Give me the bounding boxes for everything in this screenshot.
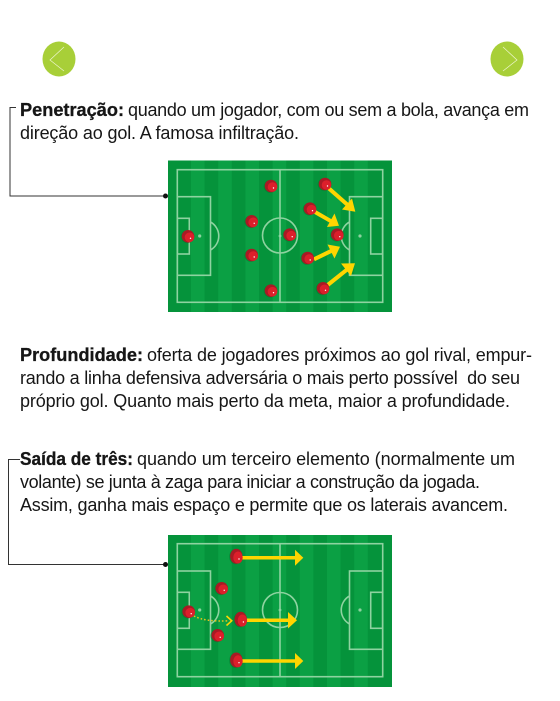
icon: previous arrow button <box>42 42 76 76</box>
connector: Penetração to pitch <box>10 108 168 198</box>
text block: Penetração <box>20 100 529 143</box>
icon: next arrow button <box>490 42 524 76</box>
arrows: forward runs <box>314 188 355 285</box>
text block: Profundidade: Profundidade: <box>20 345 143 365</box>
text block: Penetração: Penetração: <box>20 100 124 120</box>
pitch diagram: penetração <box>168 160 392 312</box>
arrows: forward runs of full-backs and midfielder <box>242 550 303 669</box>
connector: Saída de três to pitch <box>8 460 168 567</box>
players: formation <box>181 178 344 298</box>
text block: Profundidade: rando a linha defensiva adversária o mais perto possível do seu <box>20 368 520 388</box>
text block: Profundidade: oferta de jogadores próximos ao gol rival, empur- <box>147 345 532 365</box>
text block: Saída de três <box>20 449 515 515</box>
text block: Penetração: direção ao gol. A famosa infiltração. <box>20 123 299 143</box>
text block: Profundidade: próprio gol. Quanto mais perto da meta, maior a profundidade. <box>20 391 510 411</box>
pitch diagram: saída de três <box>168 535 392 687</box>
text block: Saída de três: quando um terceiro elemento (normalmente um <box>137 449 515 469</box>
players: build-up <box>181 549 247 668</box>
arrow: dotted midfielder drop <box>194 616 232 626</box>
text block: Saída de três: Saída de três: <box>20 449 133 469</box>
text block: Saída de três: Assim, ganha mais espaço e permite que os laterais avancem. <box>20 495 508 515</box>
text block: Saída de três: volante) se junta à zaga para iniciar a construção da jogada. <box>20 472 480 492</box>
text block: Penetração: quando um jogador, com ou sem a bola, avança em <box>128 100 529 120</box>
text block: Profundidade <box>20 345 532 411</box>
